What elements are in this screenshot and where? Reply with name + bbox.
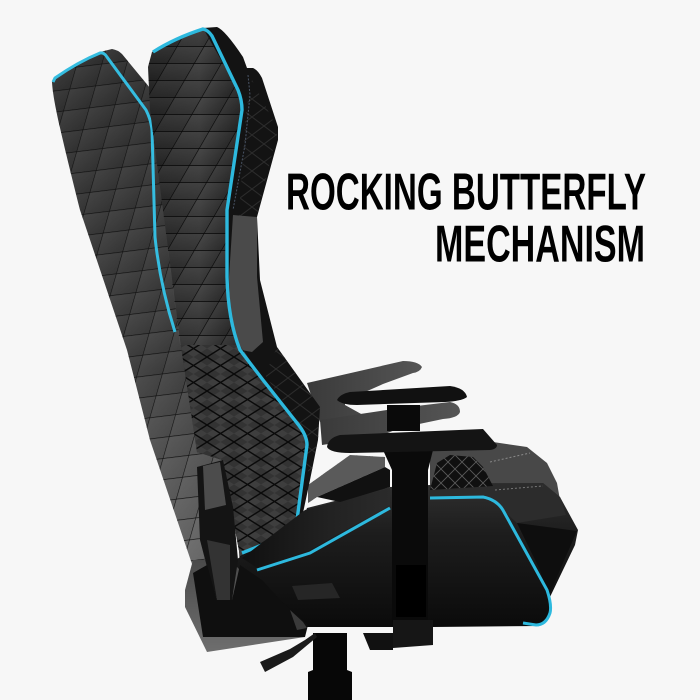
front seat back quilted face [148, 28, 307, 556]
ghost piping [53, 53, 175, 332]
seat blue piping [257, 497, 551, 625]
title [286, 164, 646, 274]
quilted seat bolster [317, 455, 493, 502]
ghost seat cushion [308, 442, 560, 503]
front armrest [327, 429, 497, 650]
ghost armrests [307, 361, 460, 445]
ghost reclined seat back [52, 49, 235, 575]
reclining bracket [197, 460, 238, 600]
front seat back wing [203, 27, 320, 565]
chair illustration [52, 27, 578, 700]
gas lift column [308, 633, 352, 700]
tilt lever [260, 633, 317, 672]
front seat back blue piping [153, 29, 307, 553]
middle armrest [337, 386, 467, 431]
mechanism base [193, 565, 340, 637]
ghost base [185, 560, 305, 652]
seat side panel [232, 483, 578, 627]
